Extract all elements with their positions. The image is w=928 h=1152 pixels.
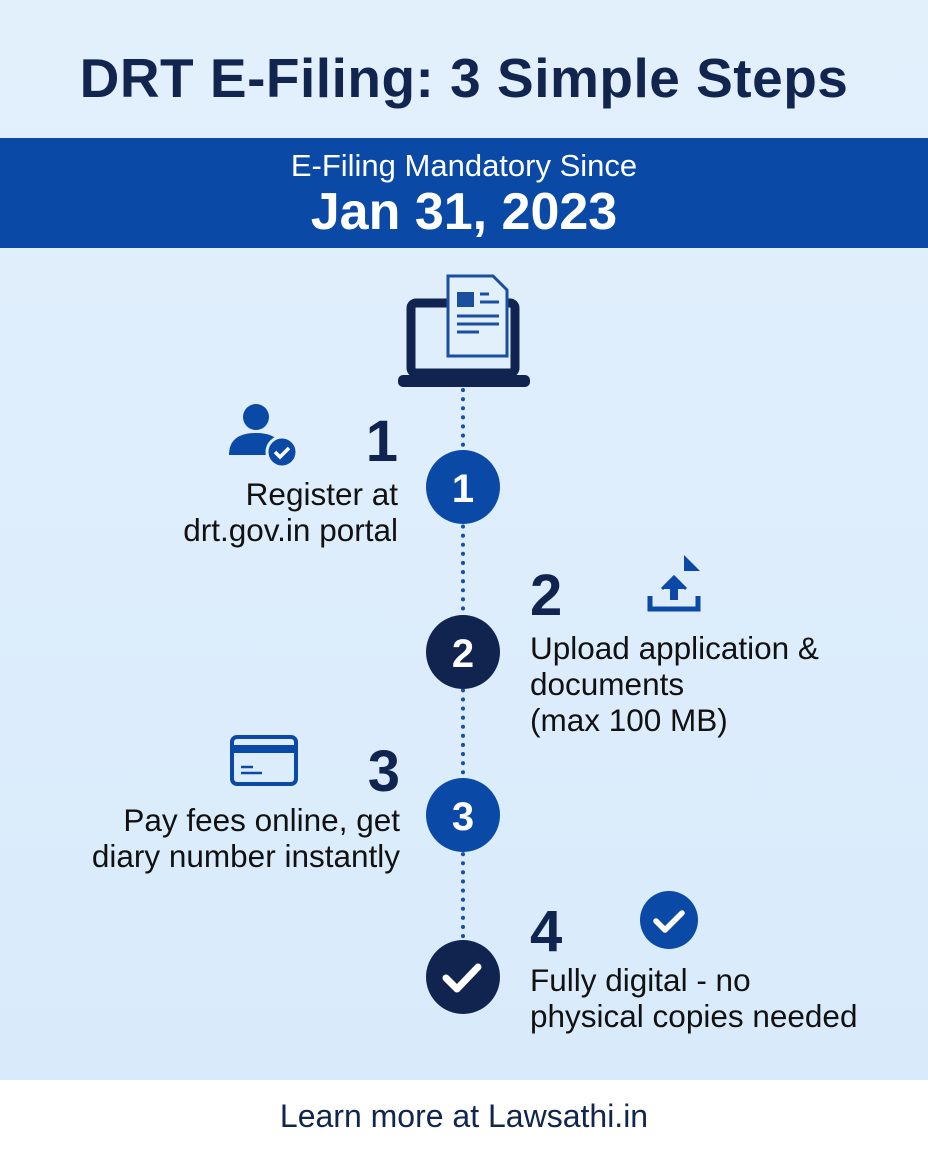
- step 4: [530, 899, 857, 1034]
- step 2: (max 100 MB): [530, 702, 728, 738]
- step 3: Pay fees online, get: [123, 802, 400, 838]
- step 2: [530, 563, 819, 738]
- footer: Learn more at Lawsathi.in: [280, 1098, 648, 1134]
- banner: mandatory date: E-Filing Mandatory Since: [291, 148, 637, 183]
- step 3: 3: [368, 739, 400, 804]
- circle 2: [426, 615, 500, 689]
- step 1: [183, 409, 398, 548]
- circle 1: [426, 450, 500, 524]
- banner: mandatory date: Jan 31, 2023: [311, 183, 617, 241]
- dotted line: [461, 390, 465, 945]
- step 4: physical copies needed: [530, 998, 857, 1034]
- icon: card: [232, 737, 296, 784]
- circle 2: 2: [452, 632, 474, 676]
- icon: check badge: [640, 891, 698, 949]
- banner: mandatory date: [0, 138, 928, 248]
- circle 4 check: [426, 940, 500, 1014]
- step 1: drt.gov.in portal: [183, 512, 398, 548]
- title: DRT E-Filing: 3 Simple Steps: [80, 47, 848, 109]
- icon: laptop with document: [398, 276, 530, 387]
- circle 3: 3: [452, 795, 474, 839]
- step 3: [92, 739, 400, 874]
- step 4: 4: [530, 899, 562, 964]
- step 2: 2: [530, 563, 562, 628]
- step 1: Register at: [246, 476, 398, 512]
- step 3: diary number instantly: [92, 838, 400, 874]
- icon: upload: [650, 555, 700, 609]
- icon: user check: [229, 404, 297, 467]
- step 4: Fully digital - no: [530, 962, 751, 998]
- step 2: documents: [530, 666, 684, 702]
- footer: [0, 1080, 928, 1152]
- step 2: Upload application &: [530, 630, 819, 666]
- circle 1: 1: [452, 467, 474, 511]
- circle 3: [426, 778, 500, 852]
- step 1: 1: [366, 409, 398, 474]
